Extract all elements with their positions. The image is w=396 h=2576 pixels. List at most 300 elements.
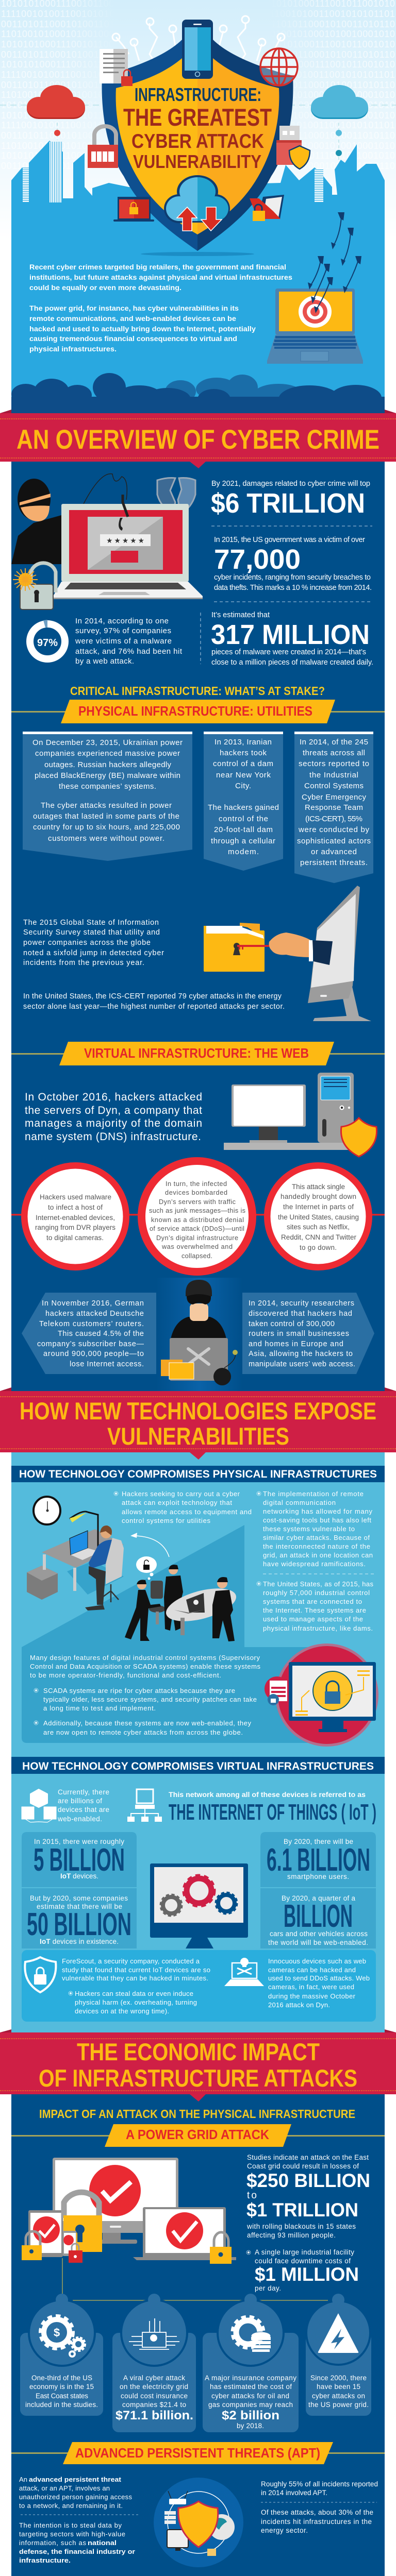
stat: quarter billion vehicles: By 2020, a quarter of a: [282, 1894, 355, 1902]
panel: infected devices bombarded: such as junk messages—this is: [149, 1207, 245, 1214]
stat: quarter billion vehicles: cars and other vehicles across: [270, 1930, 368, 1938]
panel: Iranian hackers dam: control of a dam: [213, 759, 273, 768]
panel: 15 attacks on the power grid: the US power grid.: [308, 2401, 369, 2409]
panel: infected devices bombarded: was overwhelmed and: [161, 1243, 233, 1250]
binary code pattern: 1010101000111001011001010: [1, 59, 136, 70]
binary code pattern: 1010101000111001011001010: [1, 100, 136, 110]
text: web cameras hacked: cameras, in fact, were used: [268, 1983, 354, 1991]
binary code pattern: 1101001010001010010001010: [1, 141, 136, 151]
stat: 77,000 incidents: [214, 536, 372, 592]
stat: 317 million: 317 MILLION: [211, 619, 370, 650]
stat: 1 million per day: per day.: [255, 2284, 281, 2292]
stat: 250 billion to 1 trillion: $250 BILLION: [246, 2170, 370, 2191]
panel: 300,000 routers: [242, 1293, 374, 1374]
ribbon: a power grid attack: [11, 2124, 385, 2147]
connector line: [11, 1214, 385, 1216]
stat: 6.1 billion smartphone users: By 2020, there will be: [284, 1838, 353, 1845]
binary code pattern: 0011010110001010011010110: [1, 80, 136, 90]
binary code pattern: 0011010110001010011010110: [1, 161, 136, 171]
text: global state of information security: [23, 919, 164, 967]
text: Dyn attack intro: the servers of Dyn, a company that: [25, 1105, 202, 1116]
stat: 6 trillion: By 2021, damages related to cyber crime will top: [211, 480, 370, 488]
binary code pattern: 1010101000111001011001010: [260, 150, 395, 161]
text: hackers exploit remote access: attack can exploit technology that: [122, 1499, 232, 1506]
panel: Deutsche Telekom: [22, 1293, 156, 1374]
stat: 77,000 incidents: 77,000: [214, 544, 301, 575]
text: global state of information security: The 2015 Global State of Information: [23, 919, 159, 927]
icon: hand with key reaching from monitor to folder: [204, 886, 371, 1021]
panel: insurance cost estimate: [203, 2294, 299, 2432]
text: hackers exploit remote access: allows remote access to equipment and: [122, 1508, 252, 1516]
stat: 5 billion IoT devices: 5 BILLION: [34, 1842, 125, 1878]
panel: Ukraine power outages: On December 23, 2015, Ukrainian power: [32, 738, 183, 747]
icon: phishing laptop: [53, 474, 203, 599]
title: VULNERABILITY: [133, 151, 261, 172]
connector lines: [62, 2258, 328, 2300]
icon: gear with dollar: [41, 2316, 85, 2357]
icon: red cloud: [27, 85, 85, 140]
panel: one-third of the US economy: One-third of the US: [31, 2374, 92, 2382]
ribbon: a power grid attack: A POWER GRID ATTACK: [126, 2127, 269, 2142]
heading: critical infrastructure: CRITICAL INFRASTRUCTURE: WHAT’S AT STAKE?: [70, 684, 325, 698]
stat: 5 billion IoT devices: IoT devices.: [60, 1872, 98, 1880]
text: ForeScout study: study that found that current IoT devices are so: [62, 1966, 210, 1974]
stat: 50 billion IoT devices: IoT devices in existence.: [40, 1938, 119, 1945]
text: what is an APT: national: [88, 2539, 117, 2547]
panel: attack brought down the Internet: to go down.: [300, 1244, 337, 1251]
text: what is an APT: [19, 2476, 135, 2564]
panel: attack brought down the Internet: [264, 1162, 372, 1270]
text: ForeScout study: [62, 1957, 210, 2015]
center band behind hacker: [156, 1278, 242, 1391]
icon: padlock left: [88, 126, 118, 168]
text: 97 percent of companies: by a web attack.: [75, 657, 134, 666]
panel: attack brought down the Internet: handedly brought down: [280, 1193, 356, 1200]
text: ForeScout study: devices on at the wrong time).: [75, 2007, 169, 2015]
panel: Iranian hackers dam: control of the: [219, 815, 268, 823]
text: web cameras hacked: used to send DDoS attacks. Web: [268, 1974, 370, 1982]
binary code pattern: 0011010110001010011010110: [1, 130, 136, 141]
binary code pattern: 0011010110001010011010110: [260, 161, 395, 171]
text: web cameras hacked: Innocuous devices such as web: [268, 1957, 366, 1965]
text: global state of information security: Security Survey stated that utility and: [23, 928, 160, 937]
panel: 15 attacks on the power grid: have been 15: [317, 2383, 360, 2391]
panel: ICS-CERT threats: (ICS-CERT), 55%: [305, 815, 362, 823]
panel: insurance cost estimate: gas companies may reach: [208, 2401, 293, 2409]
panel: one-third of the US economy: included in the studies.: [25, 2401, 98, 2409]
panel: Deutsche Telekom: This caused 4.5% of the: [58, 1330, 144, 1338]
stat: 317 million: It’s estimated that: [211, 611, 270, 619]
intro text: remote communications, and web-enabled devices can be: [29, 314, 236, 323]
icon: smartphone: [182, 20, 213, 79]
ribbon: advanced persistent threats: [11, 2442, 385, 2464]
binary code pattern: 1101001010001010010001010: [260, 141, 395, 151]
stat: 250 billion to 1 trillion: Studies indicate an attack on the East: [247, 2154, 369, 2161]
panel: insurance cost estimate: A major insurance company: [205, 2374, 296, 2382]
panel: Deutsche Telekom: company’s subscriber base—: [37, 1340, 144, 1348]
panel: Ukraine power outages: The cyber attacks resulted in power: [41, 801, 172, 810]
panel: Deutsche Telekom: around 900,000 people—to: [43, 1350, 144, 1358]
stat: 50 billion IoT devices: estimate that there will be: [37, 1903, 122, 1910]
stat: 250 billion to 1 trillion: to: [247, 2190, 257, 2201]
panel: IoT vulnerabilities: [22, 1950, 376, 2022]
panel: Iranian hackers dam: The hackers gained: [208, 803, 279, 812]
icon: connected cubes: [22, 1789, 56, 1822]
panel: viral cyber attack: on the electricity grid: [120, 2383, 188, 2391]
panel: Ukraine power outages: outages that lasted in some parts of the: [33, 812, 179, 821]
intro text: institutions, but future attacks against physical and virtual infrastructures: [29, 273, 292, 281]
header background sky: [0, 0, 396, 242]
text: 97 percent of companies: were victims of a malware: [75, 637, 172, 646]
stat: 6.1 billion smartphone users: [260, 1832, 376, 1887]
text: ForeScout study: ForeScout, a security company, conducted a: [62, 1957, 200, 1965]
panel: one-third of the US economy: East Coast states: [36, 2392, 88, 2400]
panel: infected devices bombarded: of service attack (DDoS)—until: [150, 1225, 244, 1232]
text: web cameras hacked: during the massive October: [268, 1992, 356, 2000]
text: global state of information security: power companies across the globe: [23, 939, 151, 947]
text: 57,000 industrial control systems: The United States, as of 2015, has: [263, 1580, 373, 1588]
dark cloud band: [11, 373, 385, 421]
icon: monitor with gears: [150, 1863, 248, 1948]
panel: 15 attacks on the power grid: cyber attacks on: [312, 2392, 365, 2400]
text: remote digital communication: have widespread ramifications.: [263, 1560, 366, 1568]
binary code pattern: 0011010110001010011010110: [260, 80, 395, 90]
title: INFRASTRUCTURE:: [135, 84, 261, 105]
panel: ICS-CERT threats: Control Systems: [304, 782, 364, 790]
panel: Deutsche Telekom: In November 2016, German: [42, 1299, 144, 1308]
text: 97 percent of companies: In 2014, according to one: [75, 617, 169, 625]
icon: USB drive: [276, 126, 310, 169]
text: remote digital communication: these systems vulnerable to: [263, 1525, 355, 1533]
binary code pattern: 1111001010011001010101101: [1, 9, 136, 19]
panel: Ukraine power outages: country for up to six hours, and 225,000: [33, 823, 180, 832]
icon: three hackers around a table: [125, 1556, 240, 1641]
panel: Ukraine power outages: these companies’ systems.: [59, 782, 156, 791]
icon: hacker: [11, 479, 61, 564]
text: APT statistics: Roughly 55% of all incidents reported: [261, 2480, 378, 2488]
panel: Iranian hackers dam: modem.: [228, 848, 259, 856]
text: SCADA systems: [30, 1654, 260, 1736]
panel: 300,000 routers: In 2014, security researchers: [249, 1299, 354, 1308]
panel: 300,000 routers: manipulate users’ web access.: [249, 1360, 355, 1368]
text: 57,000 industrial control systems: systems that are connected to: [263, 1598, 362, 1605]
panel: viral cyber attack: A viral cyber attack: [123, 2374, 185, 2382]
panel: Deutsche Telekom: Telekom customers’ routers.: [39, 1320, 144, 1328]
text: remote digital communication: the interconnected nature of the: [263, 1543, 370, 1550]
text: remote digital communication: similar cyber attacks. Because of: [263, 1534, 370, 1541]
ribbon: virtual infrastructure the web: VIRTUAL INFRASTRUCTURE: THE WEB: [84, 1045, 309, 1061]
stat: quarter billion vehicles: the world will be web-enabled.: [268, 1939, 368, 1946]
text: ICS-CERT energy attacks: In the United States, the ICS-CERT reported 79 cyber attacks in the energy: [23, 992, 282, 1001]
panel: hackers used malware: to infect a host of: [48, 1204, 103, 1211]
panel: 15 attacks on the power grid: [305, 2294, 371, 2416]
binary code pattern: 1101001010001010010001010: [260, 29, 395, 39]
panel: insurance cost estimate: by 2018.: [237, 2422, 264, 2430]
stat: 5 billion IoT devices: In 2015, there were roughly: [34, 1838, 124, 1845]
text: what is an APT: advanced persistent threat: [29, 2476, 122, 2483]
panel: ICS-CERT threats: persistent threats.: [300, 858, 368, 867]
text: SCADA systems: are now open to remote cyber attacks from across the globe.: [43, 1728, 243, 1736]
intro text: physical infrastructures.: [29, 345, 117, 353]
text: remote digital communication: grid, an attack in one location can: [263, 1551, 373, 1559]
text: web cameras hacked: [268, 1957, 370, 2009]
panel: Ukraine power outages: companies experienced massive power: [35, 749, 180, 758]
panel: 300,000 routers: discovered that hackers had: [249, 1310, 352, 1318]
panel: hackers used malware: to digital cameras.: [46, 1234, 104, 1242]
text: APT statistics: energy sector.: [261, 2527, 308, 2534]
text: billions of devices: Currently, there: [58, 1788, 109, 1796]
text: 57,000 industrial control systems: physical infrastructure, like dams.: [263, 1624, 373, 1632]
text: Dyn attack intro: manages a majority of the domain: [25, 1117, 202, 1129]
icon: phishing laptop: ★★★★★: [106, 536, 144, 545]
text: what is an APT: unauthorized person gaining access: [19, 2493, 132, 2501]
text: APT statistics: [261, 2480, 378, 2534]
text: 97 percent of companies: [75, 617, 183, 666]
subheading: virtual infrastructures: HOW TECHNOLOGY COMPROMISES VIRTUAL INFRASTRUCTURES: [22, 1760, 374, 1772]
stat: 97 percent donut: 97%: [37, 637, 58, 649]
icon: red folder: [250, 195, 284, 221]
panel: 300,000 routers: taken control of 300,000: [249, 1320, 335, 1328]
text: what is an APT: infrastructure.: [19, 2556, 71, 2564]
panel: Ukraine power outages: customers were without power.: [48, 834, 164, 843]
icon: padlock with burst: [13, 563, 56, 609]
text: 57,000 industrial control systems: used to manage aspects of the: [263, 1615, 363, 1623]
title: THE GREATEST: [123, 104, 272, 131]
text: remote digital communication: [257, 1490, 373, 1568]
panel: new technologies background: [11, 1452, 385, 2032]
intro text: [29, 263, 292, 353]
panel: ICS-CERT threats: threats across all: [303, 749, 365, 757]
text: Dyn attack intro: name system (DNS) infrastructure.: [25, 1131, 201, 1143]
text: remote digital communication: networking has allowed for many: [263, 1507, 372, 1515]
heading: impact on physical infrastructure: IMPACT OF AN ATTACK ON THE PHYSICAL INFRASTRUCTURE: [39, 2107, 355, 2121]
banner: how new technologies expose vulnerabilities: VULNERABILITIES: [107, 1422, 289, 1450]
icon: protected devices: [22, 2158, 236, 2264]
stat: 317 million: close to a million pieces of malware created daily.: [211, 658, 373, 667]
panel: ICS-CERT threats: were conducted by: [298, 825, 369, 834]
icon: blue cloud: [311, 85, 368, 160]
text: what is an APT: targeting sectors with high-value: [19, 2530, 125, 2538]
stat: 1 million per day: $1 MILLION: [255, 2264, 359, 2285]
stat: 77,000 incidents: cyber incidents, ranging from security breaches to: [214, 573, 371, 582]
intro text: The power grid, for instance, has cyber vulnerabilities in its: [29, 304, 239, 312]
stat: 250 billion to 1 trillion: affecting 93 million people.: [247, 2231, 336, 2239]
binary code pattern: 1010101000111001011001010: [260, 110, 395, 121]
panel: Deutsche Telekom: hackers attacked Deutsche: [45, 1310, 144, 1318]
panel: hackers used malware: Hackers used malware: [40, 1193, 111, 1201]
text: ICS-CERT energy attacks: sector alone last year—the highest number of reported attacks per sector.: [23, 1003, 285, 1011]
text: remote digital communication: digital communication: [263, 1499, 336, 1506]
subheading: physical infrastructures: [11, 1466, 385, 1482]
icon: broken shield: [157, 478, 195, 514]
icon: red laptop: [113, 197, 154, 222]
binary code pattern: 1111001010011001010101101: [260, 70, 395, 80]
banner: an overview of cyber crime: [0, 410, 396, 468]
icon: office worker at desk: [27, 1497, 124, 1611]
stat: quarter billion vehicles: [260, 1888, 376, 1948]
icon: lightning warning triangle: [318, 2313, 358, 2353]
dark panel: SCADA background: [22, 1525, 320, 1743]
icon: title shield: [102, 31, 293, 256]
binary code pattern: 0011010110001010011010110: [260, 49, 395, 60]
binary code pattern: 1111001010011001010101101: [1, 70, 136, 80]
binary code pattern: 1101001010001010010001010: [1, 29, 136, 39]
icon: desktop computer with shield: [224, 1073, 377, 1157]
ribbon: physical infrastructure utilities: PHYSICAL INFRASTRUCTURE: UTILITIES: [78, 703, 312, 719]
binary code pattern: [1, 0, 395, 171]
binary code pattern: 1101001010001010010001010: [260, 90, 395, 100]
panel: viral cyber attack: [112, 2294, 196, 2432]
panel: Ukraine power outages: [23, 732, 192, 861]
panel: viral cyber attack: could cost insurance: [121, 2392, 188, 2400]
text: Dyn attack intro: [25, 1091, 202, 1143]
text: remote digital communication: cost-saving tools but has also left: [263, 1516, 371, 1524]
text: what is an APT: to a network, and remaining in it.: [19, 2502, 123, 2510]
icon: hacker at laptop: [161, 1280, 238, 1385]
panel: infected devices bombarded: collapsed.: [182, 1252, 212, 1260]
text: what is an APT: attack, or an APT, involves an: [19, 2484, 110, 2492]
icon: network computer: [127, 1789, 162, 1822]
panel: attack brought down the Internet: This attack single: [292, 1183, 345, 1191]
text: 97 percent of companies: attack, and 76% had been hit: [75, 647, 183, 656]
panel: economic impact background: [11, 2094, 385, 2576]
binary code pattern: 0011010110001010011010110: [260, 19, 395, 29]
panel: Ukraine power outages: placed BlackEnergy (BE) malware within: [35, 771, 180, 780]
panel: insurance cost estimate: $2 billion: [222, 2409, 279, 2422]
binary code pattern: 1010101000111001011001010: [260, 39, 395, 49]
panel: hackers used malware: Internet-enabled devices,: [36, 1214, 115, 1222]
text: hackers exploit remote access: control systems for utilities: [122, 1517, 210, 1524]
text: billions of devices: devices that are: [58, 1806, 109, 1814]
panel: 300,000 routers: routers in small businesses: [249, 1330, 349, 1338]
banner: the economic impact: [0, 2029, 396, 2102]
text: web cameras hacked: cameras can be hacked and: [268, 1966, 356, 1974]
subheading: physical infrastructures: HOW TECHNOLOGY COMPROMISES PHYSICAL INFRASTRUCTURES: [19, 1468, 377, 1480]
stat: 77,000 incidents: In 2015, the US government was a victim of over: [214, 536, 365, 544]
panel: infected devices bombarded: known as a distributed denial: [151, 1216, 244, 1224]
text: APT statistics: in 2014 involved APT.: [261, 2489, 327, 2497]
ribbon: physical infrastructure utilities: [11, 700, 385, 723]
stat: 97 percent donut: [30, 620, 65, 659]
text: SCADA systems: Control and Data Acquisition or SCADA systems) enable these systems: [30, 1663, 260, 1670]
text: SCADA systems: to be more operator-friendly, functional and cost-efficient.: [30, 1671, 221, 1679]
stat: 1 million per day: could face downtime costs of: [255, 2257, 351, 2265]
panel: infected devices bombarded: devices bombarded: [165, 1189, 227, 1196]
panel: Deutsche Telekom: lose Internet access.: [70, 1360, 144, 1368]
icon: circuit lines behind the shield: [112, 16, 285, 62]
panel: Ukraine power outages: outages. Russian hackers allegedly: [44, 760, 171, 769]
binary code pattern: 1111001010011001010101101: [260, 9, 395, 19]
panel: ICS-CERT threats: Response Team: [305, 803, 363, 812]
panel: insurance cost estimate: has estimated the cost of: [210, 2383, 292, 2391]
panel: attack brought down the Internet: Reddit, CNN and Twitter: [281, 1233, 357, 1241]
panel: viral cyber attack: $71.1 billion.: [116, 2409, 193, 2422]
text: 57,000 industrial control systems: roughly 57,000 industrial control: [263, 1589, 370, 1597]
stat: 1 million per day: A single large industrial facility: [255, 2248, 354, 2256]
stat: 50 billion IoT devices: 50 BILLION: [27, 1907, 131, 1942]
text: SCADA systems: typically older, less secure systems, and security patches can take: [43, 1696, 257, 1703]
binary code pattern: 1010101000111001011001010: [1, 39, 136, 49]
icon: gear and coins: [233, 2317, 271, 2352]
text: hackers exploit remote access: [114, 1490, 252, 1524]
icon: center cloud with arrows: [164, 175, 230, 231]
text: SCADA systems: Many design features of digital industrial control systems (Supervisory: [30, 1654, 260, 1662]
panel: ICS-CERT threats: or advanced: [311, 848, 357, 856]
stat: 50 billion IoT devices: [22, 1888, 137, 1948]
panel: attack brought down the Internet: the Internet in parts of: [283, 1203, 354, 1211]
panel: 300,000 routers: and homes in Europe and: [249, 1340, 343, 1348]
icon: circuit laptop with skull: [129, 2318, 179, 2349]
arrow: from hackers to worker: [130, 1533, 169, 1557]
text: global state of information security: incidents from the previous year.: [23, 959, 144, 967]
panel: ICS-CERT threats: In 2014, of the 245: [300, 738, 368, 747]
text: what is an APT: The intention is to steal data by: [19, 2521, 122, 2529]
binary code pattern: 1010101000111001011001010: [1, 110, 136, 121]
text: SCADA systems: Additionally, because these systems are now web-enabled, they: [43, 1719, 252, 1727]
text: APT statistics: Of these attacks, about 30% of the: [261, 2509, 373, 2516]
intro text: causing tremendous financial consequences to virtual and: [29, 334, 237, 343]
icon: shield with lock: [25, 1957, 56, 1992]
stat: 317 million: [211, 611, 373, 667]
intro text: hacked and used to actually bring down the Internet, potentially: [29, 325, 256, 333]
icon: laptop with skull: [224, 1958, 264, 1986]
text: what is an APT: information, such as: [19, 2539, 87, 2547]
panel: 300,000 routers: Asia, allowing the hackers to: [249, 1350, 353, 1358]
icon: arrows hitting the target laptop: [267, 212, 363, 364]
panel: ICS-CERT threats: [294, 732, 373, 883]
text: SCADA systems: SCADA systems are ripe for cyber attacks because they are: [43, 1687, 235, 1694]
stat: 317 million: pieces of malware were created in 2014—that’s: [211, 648, 366, 656]
text: what is an APT: defense, the financial industry or: [19, 2548, 135, 2555]
skyline and intro panel: [11, 141, 385, 423]
text: SCADA systems: a long time to test and implement.: [43, 1704, 156, 1712]
panel: Iranian hackers dam: [204, 732, 283, 871]
panel: attack brought down the Internet: sites such as Netflix,: [287, 1223, 350, 1231]
text: global state of information security: noted a sixfold jump in detected cyber: [23, 949, 164, 957]
stat: 5 billion IoT devices: [22, 1832, 137, 1887]
binary code pattern: 1111001010011001010101101: [1, 120, 136, 130]
text: billions of devices: are billions of: [58, 1797, 102, 1805]
binary code pattern: 0011010110001010011010110: [260, 130, 395, 141]
text: 57,000 industrial control systems: the Internet. These systems are: [263, 1606, 366, 1614]
text: ForeScout study: vulnerable that they can be hacked in minutes.: [62, 1974, 208, 1982]
binary code pattern: 0011010110001010011010110: [1, 19, 136, 29]
title: [123, 84, 272, 172]
panel: one-third of the US economy: economy is in the 15: [29, 2383, 94, 2391]
text: Dyn attack intro: In October 2016, hackers attacked: [25, 1091, 202, 1103]
text: ICS-CERT energy attacks: [23, 992, 285, 1011]
panel: hackers used malware: [21, 1162, 129, 1270]
stat: 250 billion to 1 trillion: [246, 2154, 370, 2239]
divider dashes: [201, 526, 372, 664]
text: ForeScout study: Hackers can steal data or even induce: [75, 1990, 193, 1997]
binary code pattern: 1111001010011001010101101: [260, 120, 395, 130]
panel: one-third of the US economy: [20, 2294, 103, 2416]
panel: viral cyber attack: companies $21.4 to: [122, 2401, 186, 2409]
text: APT statistics: incidents hit infrastructures in the: [261, 2518, 372, 2526]
text: remote digital communication: The implementation of remote: [263, 1490, 364, 1498]
icon: gear with dollar: $: [54, 2326, 60, 2339]
panel: infected devices bombarded: Dyn’s servers with traffic: [159, 1198, 236, 1206]
text: 97 percent of companies: survey, 97% of companies: [75, 626, 171, 635]
stat: 6 trillion: $6 TRILLION: [211, 488, 365, 519]
text: web cameras hacked: 2016 attack on Dyn.: [268, 2001, 330, 2009]
panel: Iranian hackers dam: near New York: [216, 771, 271, 779]
icon: locked document: [100, 49, 133, 86]
panel: ICS-CERT threats: sophisticated actors: [297, 837, 371, 845]
panel: Iranian hackers dam: through a cellular: [211, 837, 275, 845]
text: billions of devices: web-enabled.: [57, 1815, 102, 1823]
